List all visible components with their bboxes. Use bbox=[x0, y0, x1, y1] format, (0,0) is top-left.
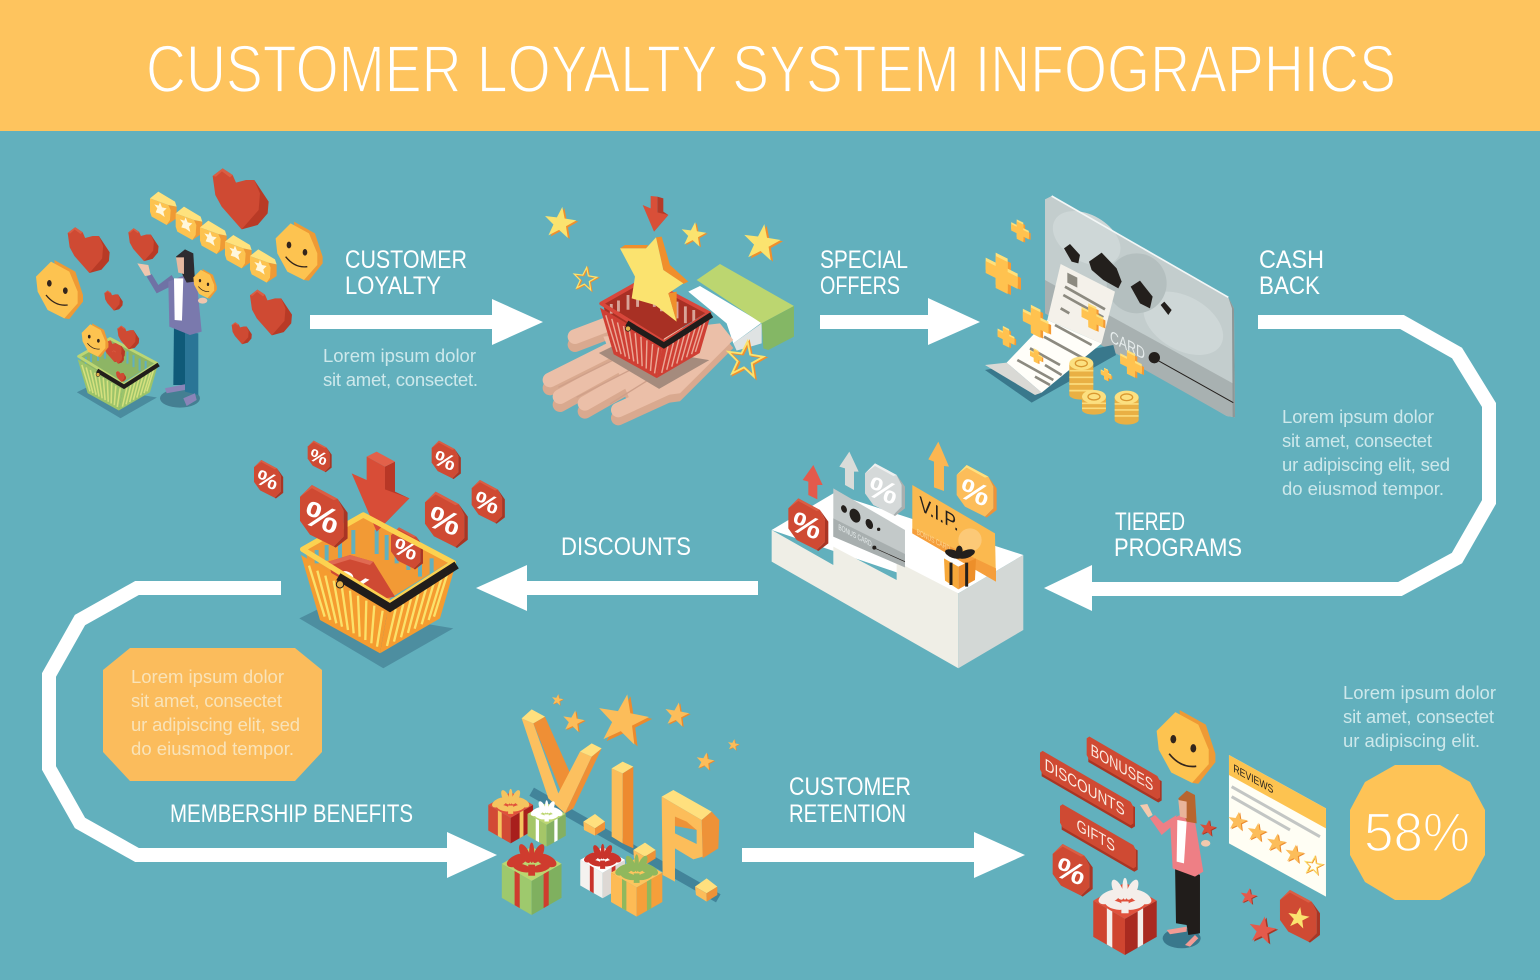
icon: review stars bbox=[1226, 810, 1324, 875]
heading: special offers: SPECIAL bbox=[820, 246, 908, 274]
heading: discounts: DISCOUNTS bbox=[561, 533, 691, 561]
icon: vip bonus card bbox=[912, 485, 996, 582]
figure: woman bbox=[137, 249, 217, 408]
icon: red basket bbox=[599, 279, 712, 389]
icon: orange up arrow bbox=[928, 442, 949, 491]
heading: tiered programs: TIERED bbox=[1115, 508, 1185, 536]
illustration: vip gifts bbox=[488, 690, 741, 917]
icon: smiley bbox=[1157, 710, 1215, 784]
icon: red badge in basket bbox=[328, 555, 395, 614]
text block: retention: ur adipiscing elit. bbox=[1343, 730, 1480, 751]
icon: letter I bbox=[612, 762, 633, 848]
icon: sleeve bbox=[688, 264, 794, 351]
icon: red stars bbox=[1239, 887, 1280, 945]
icon: stepped podium bbox=[772, 493, 1023, 668]
icon: grey percent badge: % bbox=[864, 470, 903, 511]
icon: silver bonus card bbox=[833, 488, 905, 567]
icon: percent badge: % bbox=[1051, 850, 1090, 892]
icon: orange gift bbox=[944, 546, 976, 589]
icon: letter V bbox=[522, 709, 602, 813]
icon: dot cubes bbox=[583, 814, 717, 902]
icon: open hand bbox=[550, 323, 733, 418]
icon: coin stacks bbox=[1069, 357, 1139, 425]
stat badge: 58 percent bbox=[1350, 765, 1485, 900]
icon: red percent badge: % bbox=[787, 505, 826, 546]
text: card: CARD bbox=[1110, 327, 1145, 364]
text block: cash back: do eiusmod tempor. bbox=[1282, 478, 1444, 499]
icon: orange basket back bbox=[299, 517, 453, 668]
icon: bonuses sign: BONUSES bbox=[1091, 740, 1153, 795]
illustration: special offers bbox=[542, 196, 794, 418]
icon: gifts sign: GIFTS bbox=[1077, 815, 1115, 856]
icon: big star bbox=[620, 237, 688, 322]
text block: cash back: sit amet, consectet bbox=[1282, 430, 1432, 451]
icon: red down arrow bbox=[643, 196, 668, 232]
arrow: discounts to membership benefits bbox=[49, 588, 497, 878]
icon: floating percent badges: % bbox=[471, 485, 503, 520]
text block: retention: Lorem ipsum dolor bbox=[1343, 682, 1496, 703]
icon: silver card bbox=[1043, 196, 1235, 417]
icon: vip bonus card: BONUS CARD bbox=[917, 526, 950, 553]
icon: receipt bbox=[985, 264, 1116, 403]
icon: green basket bbox=[77, 338, 159, 418]
icon: red up arrow bbox=[803, 465, 823, 499]
heading: tiered programs: PROGRAMS bbox=[1114, 534, 1242, 562]
icon: star badge bbox=[1280, 890, 1320, 943]
icon: smileys bbox=[36, 222, 323, 319]
icon: small stars bbox=[542, 205, 785, 378]
icon: small badge in basket: % bbox=[390, 533, 421, 566]
icon: orange percent badge: % bbox=[955, 471, 994, 513]
illustration: customer loyalty bbox=[36, 168, 323, 418]
arrow: customer loyalty to special offers bbox=[310, 299, 543, 345]
icon: gift boxes bbox=[488, 789, 662, 917]
illustration: customer retention bbox=[1040, 710, 1326, 955]
text: reviews: REVIEWS bbox=[1233, 761, 1273, 796]
text block: cash back: ur adipiscing elit, sed bbox=[1282, 454, 1450, 475]
heading: customer loyalty: CUSTOMER bbox=[345, 246, 467, 274]
icon: floating percent badges: % bbox=[307, 446, 330, 470]
figure: woman bbox=[1140, 791, 1218, 948]
icon: vip bonus card: V.I.P. bbox=[919, 491, 959, 536]
heading: cash back: CASH bbox=[1259, 246, 1324, 274]
text block: cash back: Lorem ipsum dolor bbox=[1282, 406, 1434, 427]
text block: customer loyalty: Lorem ipsum dolor bbox=[323, 345, 476, 366]
illustration: cash back card bbox=[985, 196, 1235, 425]
text block: callout: do eiusmod tempor. bbox=[131, 738, 294, 759]
icon: discounts sign: DISCOUNTS bbox=[1045, 755, 1125, 820]
text block: callout: Lorem ipsum dolor bbox=[131, 666, 284, 687]
text block: retention: sit amet, consectet bbox=[1343, 706, 1494, 727]
icon: red badge in basket: % bbox=[329, 561, 379, 614]
header band bbox=[0, 0, 1540, 131]
icon: stars bbox=[551, 690, 741, 771]
icon: star rating row bbox=[150, 192, 277, 283]
panel: reviews card bbox=[1226, 755, 1326, 897]
arrow: cash back to tiered programs bbox=[1044, 322, 1489, 611]
icon: gifts sign bbox=[1060, 803, 1138, 874]
arrow: membership benefits to customer retention bbox=[742, 832, 1025, 878]
icon: big gift bbox=[1093, 878, 1157, 955]
heading: cash back: BACK bbox=[1259, 272, 1320, 300]
icon: floating percent badges: % bbox=[424, 500, 465, 543]
text block: customer loyalty: sit amet, consectet. bbox=[323, 369, 478, 390]
heading: customer retention: CUSTOMER bbox=[789, 773, 911, 801]
icon: floating percent badges bbox=[253, 441, 505, 548]
icon: floating percent badges: % bbox=[431, 445, 459, 476]
icon: big red down arrow bbox=[352, 452, 409, 532]
text block: callout: ur adipiscing elit, sed bbox=[131, 714, 300, 735]
icon: grey up arrow bbox=[839, 452, 859, 490]
arrow: special offers to cash back bbox=[820, 298, 980, 345]
icon: floating percent badges: % bbox=[253, 465, 281, 495]
heading: customer loyalty: LOYALTY bbox=[345, 272, 441, 300]
heading: membership benefits: MEMBERSHIP BENEFITS bbox=[170, 800, 413, 828]
heading: customer retention: RETENTION bbox=[789, 800, 906, 828]
icon: items falling into basket bbox=[82, 323, 139, 382]
shadow strip bbox=[532, 792, 718, 898]
arrow: tiered programs to discounts bbox=[476, 565, 758, 611]
icon: basket front bbox=[301, 515, 457, 653]
illustration: tiered programs bbox=[772, 442, 1023, 668]
icon: gold plus signs bbox=[986, 217, 1144, 383]
text: bonus card: BONUS CARD bbox=[838, 522, 872, 549]
heading: special offers: OFFERS bbox=[820, 272, 900, 300]
text block: callout: sit amet, consectet bbox=[131, 690, 282, 711]
illustration: discounts basket bbox=[253, 441, 505, 668]
icon: floating percent badges: % bbox=[299, 493, 345, 542]
stat badge: 58 percent: 58% bbox=[1364, 801, 1470, 863]
panel: orange text callout bbox=[103, 648, 322, 781]
icon: hearts bbox=[68, 168, 292, 344]
icon: letter P bbox=[662, 790, 719, 882]
